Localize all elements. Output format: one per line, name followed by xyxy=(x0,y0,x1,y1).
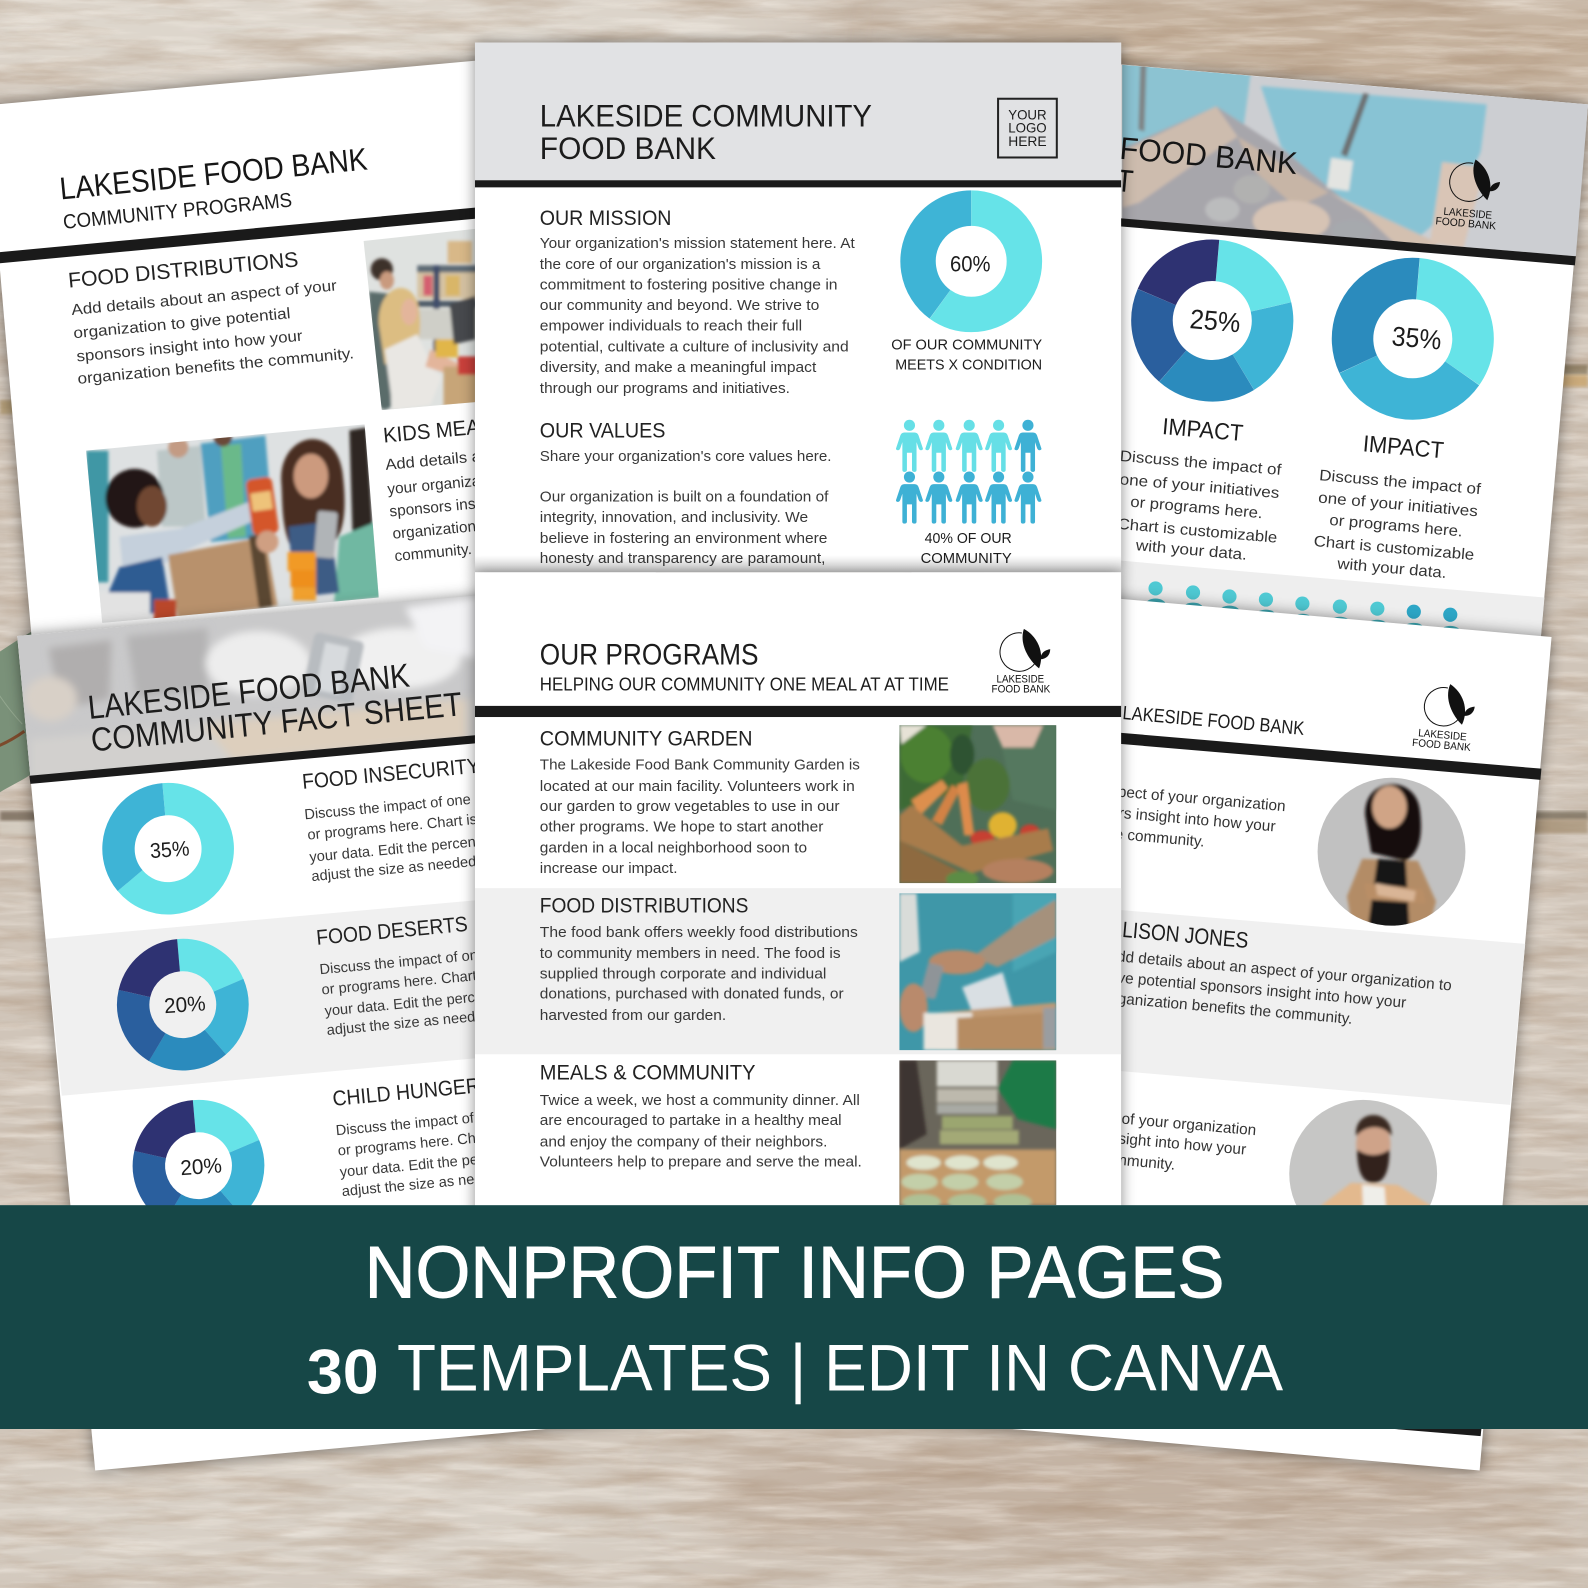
text: our mission: empower individuals to reach their full xyxy=(540,319,802,335)
column text: impact left: IMPACT xyxy=(1161,413,1244,446)
caption: 40% of our community xyxy=(921,530,1012,567)
column text: impact left xyxy=(1117,413,1283,564)
donut chart: 60%: 60% xyxy=(950,251,990,276)
section: food distributions: organization benefits the community. xyxy=(77,345,355,388)
text: food deserts: your data. Edit the percentage xyxy=(324,986,520,1020)
column text: impact right: Chart is customizable xyxy=(1313,533,1475,564)
column text: impact right: or programs here. xyxy=(1329,512,1463,540)
eucalyptus leaf decoration xyxy=(0,630,36,800)
text: community garden: other programs. We hope to start another xyxy=(540,819,824,835)
title: Lakeside Food Bank community fact sheet: COMMUNITY FACT SHEET xyxy=(89,686,464,759)
text: our values: believe in fostering an environment where xyxy=(540,531,827,547)
text: our mission: our community and beyond. We strive to xyxy=(540,298,819,314)
band: gray row xyxy=(1114,909,1525,1105)
header bar xyxy=(1114,732,1541,780)
text: community garden: located at our main facility. Volunteers work in xyxy=(540,779,855,795)
subtitle: community programs: COMMUNITY PROGRAMS xyxy=(62,190,293,234)
donut chart: 35% xyxy=(98,779,238,919)
photo: crate of vegetables xyxy=(899,725,1056,887)
text: our mission: through our programs and initiatives. xyxy=(540,381,790,397)
logo: Lakeside Food Bank xyxy=(1412,682,1476,754)
photo: kids packing grocery bag xyxy=(81,420,385,628)
text: child hunger: or programs here. Chart is xyxy=(337,1128,508,1160)
text: food deserts: adjust the size as needed. xyxy=(326,1007,496,1039)
text: bio three: sponsors insight into how your xyxy=(1039,1124,1247,1159)
logo: Lakeside Food Bank xyxy=(991,629,1050,696)
text: child hunger xyxy=(331,1073,535,1200)
title: Lakeside Food Bank: LAKESIDE FOOD BANK xyxy=(1122,703,1305,740)
logo: Lakeside Food Bank: FOOD BANK xyxy=(1435,215,1497,232)
heading: nonprofit info pages: NONPROFIT INFO PAGES xyxy=(365,1232,1224,1313)
text: community garden: our garden to grow vegetables to use in our xyxy=(540,799,840,815)
column text: impact left: Chart is customizable xyxy=(1117,516,1278,547)
header bar xyxy=(475,706,1121,717)
caption: 40% of our community: COMMUNITY xyxy=(921,550,1012,567)
text: community garden: garden in a local neighborhood soon to xyxy=(540,841,807,857)
footer band with people row xyxy=(1114,560,1544,881)
title: Lakeside Food Bank community fact sheet: LAKESIDE FOOD BANK xyxy=(86,658,411,727)
text: bio two: Add details about an aspect of your organization to xyxy=(1106,947,1452,994)
text: child hunger: your data. Edit the percentage xyxy=(339,1147,535,1181)
title: Lakeside Food Bank fact sheet: LAKESIDE FOOD BANK xyxy=(963,117,1299,181)
section: food distributions: Add details about an aspect of your xyxy=(71,277,337,319)
column text: impact right: IMPACT xyxy=(1362,430,1445,463)
text: bio one xyxy=(956,770,1286,851)
column text: impact right: with your data. xyxy=(1336,555,1447,582)
text: child hunger: Discuss the impact of one of xyxy=(335,1106,520,1139)
donut chart: 35%: 35% xyxy=(1391,320,1443,356)
logo placeholder box: HERE xyxy=(1008,134,1047,150)
panel: community fact sheet page (left) xyxy=(10,584,689,1471)
text: food deserts: Discuss the impact of one of xyxy=(319,945,504,978)
text: food insecurity: Discuss the impact of one of your xyxy=(304,787,520,823)
logo: Lakeside Food Bank: LAKESIDE xyxy=(997,674,1044,686)
text: our mission: potential, cultivate a culture of inclusivity and xyxy=(540,339,849,355)
text: our mission: OUR MISSION xyxy=(540,206,671,230)
title: Lakeside Community Food Bank: FOOD BANK xyxy=(540,131,716,166)
column text: impact left: one of your initiatives xyxy=(1119,471,1280,502)
section: food distributions: organization to give potential xyxy=(73,305,291,342)
column text: impact left: Discuss the impact of xyxy=(1119,448,1283,479)
text: meals and community: Twice a week, we host a community dinner. All xyxy=(540,1093,860,1109)
text: our mission: commitment to fostering positive change in xyxy=(540,278,838,294)
text: food distributions: FOOD DISTRIBUTIONS xyxy=(540,893,748,917)
photo: volunteers at pantry shelves xyxy=(364,229,475,410)
donut chart: 35% xyxy=(1329,255,1497,423)
column text: impact left: with your data. xyxy=(1134,537,1248,564)
text: our mission: Your organization's mission statement here. At xyxy=(540,236,855,252)
photo: smiling woman portrait xyxy=(1318,778,1466,926)
text: food distributions: harvested from our garden. xyxy=(540,1008,726,1024)
panel: community programs page (top left) xyxy=(0,42,656,636)
text: meals and community: Volunteers help to prepare and serve the meal. xyxy=(540,1155,862,1171)
title: Lakeside Community Food Bank: LAKESIDE COMMUNITY xyxy=(540,99,872,134)
text: food distributions xyxy=(540,893,858,1024)
caption: 40% of our community: 40% OF OUR xyxy=(925,530,1012,547)
donut chart: 20% lower: 20% xyxy=(180,1153,223,1180)
header bar xyxy=(29,735,475,784)
text: bio three xyxy=(1008,1101,1257,1174)
band: gray row xyxy=(46,900,475,1096)
text: food distributions: to community members in need. The food is xyxy=(540,946,841,962)
panel: our programs page (center bottom) xyxy=(475,572,1121,1220)
text: bio one: Add details about an aspect of your organization xyxy=(957,770,1286,815)
band: gray row xyxy=(475,888,1121,1054)
text: bio three: the community. xyxy=(1072,1148,1176,1174)
section: kids meals: sponsors insight into how your xyxy=(389,484,596,520)
text: food insecurity: or programs here. Chart is xyxy=(307,812,478,844)
subtitle: helping our community: HELPING OUR COMMUNITY ONE MEAL AT AT TIME xyxy=(540,675,949,695)
donut chart: 60% xyxy=(897,187,1045,336)
text: food distributions: supplied through corporate and individual xyxy=(540,966,826,982)
text: food deserts: FOOD DESERTS xyxy=(315,912,469,950)
text: food deserts: or programs here. Chart is xyxy=(321,967,492,999)
text: our mission xyxy=(540,206,855,397)
logo placeholder box: LOGO xyxy=(1008,121,1047,137)
donut chart: 35%: 35% xyxy=(149,836,190,863)
text: bio two: organization benefits the community. xyxy=(1103,989,1353,1028)
panel: team bios page (right) xyxy=(841,580,1552,1471)
header bar xyxy=(1114,218,1576,265)
logo: Lakeside Food Bank xyxy=(1435,157,1502,232)
logo: Lakeside Food Bank: FOOD BANK xyxy=(991,684,1050,696)
text: food insecurity xyxy=(301,754,520,885)
column text: impact left: or programs here. xyxy=(1130,494,1263,522)
text: food distributions: The food bank offers weekly food distributions xyxy=(540,925,858,941)
title: Lakeside Community Food Bank xyxy=(540,99,872,166)
title: our programs: OUR PROGRAMS xyxy=(540,638,759,671)
text: our mission: diversity, and make a meaningful impact xyxy=(540,360,816,376)
text: bio two: give potential sponsors insight into how your xyxy=(1105,968,1407,1012)
caption: of our community meets x condition: MEETS X CONDITION xyxy=(895,357,1042,374)
donut chart: 20% xyxy=(113,935,253,1075)
column text: impact right: Discuss the impact of xyxy=(1319,467,1482,498)
section: kids meals: your organization to give potential xyxy=(387,460,617,498)
panel: impact charts page (top right) xyxy=(910,38,1588,636)
text: bio two: ALLISON JONES xyxy=(1098,915,1249,953)
hero photo: volunteers with canned food box xyxy=(1122,65,1588,256)
text: community garden xyxy=(540,726,860,877)
photo: hands passing food donations xyxy=(899,893,1056,1050)
text: our values: integrity, innovation, and inclusivity. We xyxy=(540,510,808,526)
column text: impact right: one of your initiatives xyxy=(1318,489,1479,520)
title: Lakeside Food Bank: LAKESIDE FOOD BANK xyxy=(58,141,369,206)
header bar xyxy=(475,180,1121,187)
logo: Lakeside Food Bank: LAKESIDE xyxy=(1443,206,1492,222)
photo: bearded man portrait xyxy=(1289,1100,1438,1206)
subheading: 30 templates edit in canva: TEMPLATES | EDIT IN CANVA xyxy=(397,1331,1283,1405)
subheading: 30 templates edit in canva: 30 xyxy=(307,1338,379,1408)
text: food distributions: donations, purchased with donated funds, or xyxy=(540,987,844,1003)
text: our values: honesty and transparency are paramount, xyxy=(540,551,825,567)
text: meals and community xyxy=(540,1061,862,1171)
text: meals and community: MEALS & COMMUNITY xyxy=(540,1061,756,1085)
pictogram: people 40 percent xyxy=(896,420,1041,524)
section: kids meals: community. xyxy=(394,541,472,565)
logo: Lakeside Food Bank: FOOD BANK xyxy=(1412,737,1471,754)
text: food insecurity: your data. Edit the percentage xyxy=(309,832,505,866)
section: food distributions: sponsors insight into how your xyxy=(76,328,303,366)
section: kids meals: Add details about an aspect of xyxy=(385,436,609,474)
text: community garden: COMMUNITY GARDEN xyxy=(540,726,752,750)
text: food deserts xyxy=(315,912,520,1039)
panel: mission and values page (center top) xyxy=(475,43,1121,572)
donut chart: 25% xyxy=(1127,236,1297,406)
text: child hunger: CHILD HUNGER xyxy=(331,1073,481,1111)
section: kids meals: KIDS MEALS xyxy=(382,412,505,448)
column text: impact right xyxy=(1313,430,1482,582)
hero photo: gloved hands with can xyxy=(18,596,475,776)
text: child hunger: adjust the size as needed. xyxy=(341,1168,511,1200)
donut chart: 20%: 20% xyxy=(163,991,206,1018)
section: kids meals: organization benefits the xyxy=(392,510,560,543)
footer bar fragment xyxy=(1357,1426,1482,1436)
text: bio one: to give potential sponsors insight into how your xyxy=(957,791,1276,835)
text: food insecurity: adjust the size as needed. xyxy=(311,854,481,885)
section: food distributions xyxy=(67,247,355,388)
text: our values: Our organization is built on a foundation of xyxy=(540,489,829,505)
text: our values: Share your organization's core values here. xyxy=(540,449,831,465)
photo: community meal service xyxy=(899,1060,1056,1210)
text: bio three: about an aspect of your organization xyxy=(1008,1101,1257,1139)
text: our values: OUR VALUES xyxy=(540,419,665,443)
logo placeholder box xyxy=(998,99,1057,157)
logo placeholder box: YOUR xyxy=(1008,108,1047,124)
text: our values xyxy=(540,419,831,567)
text: our mission: the core of our organization's mission is a xyxy=(540,257,821,273)
section: kids meals xyxy=(382,412,617,565)
text: meals and community: and enjoy the company of their neighbors. xyxy=(540,1134,827,1150)
title: Lakeside Food Bank fact sheet: FACT SHEET xyxy=(960,150,1135,199)
donut chart: 20% lower xyxy=(128,1096,269,1236)
text: food insecurity: FOOD INSECURITY xyxy=(301,754,481,794)
text: community garden: increase our impact. xyxy=(540,861,678,877)
text: meals and community: are encouraged to partake in a healthy meal xyxy=(540,1113,842,1129)
logo: Lakeside Food Bank: LAKESIDE xyxy=(1418,727,1467,743)
text: community garden: The Lakeside Food Bank Community Garden is xyxy=(540,758,860,774)
text: bio one: organization benefits the community. xyxy=(956,812,1205,851)
banner: title strip xyxy=(0,1205,1588,1429)
donut chart: 25%: 25% xyxy=(1189,303,1242,338)
header band xyxy=(475,43,1121,181)
header bar xyxy=(0,208,475,263)
text: bio two xyxy=(1098,915,1452,1028)
caption: of our community meets x condition xyxy=(891,336,1042,374)
section: food distributions: FOOD DISTRIBUTIONS xyxy=(67,247,299,293)
title: Lakeside Food Bank community fact sheet xyxy=(86,658,464,759)
caption: of our community meets x condition: OF OUR COMMUNITY xyxy=(891,336,1042,353)
